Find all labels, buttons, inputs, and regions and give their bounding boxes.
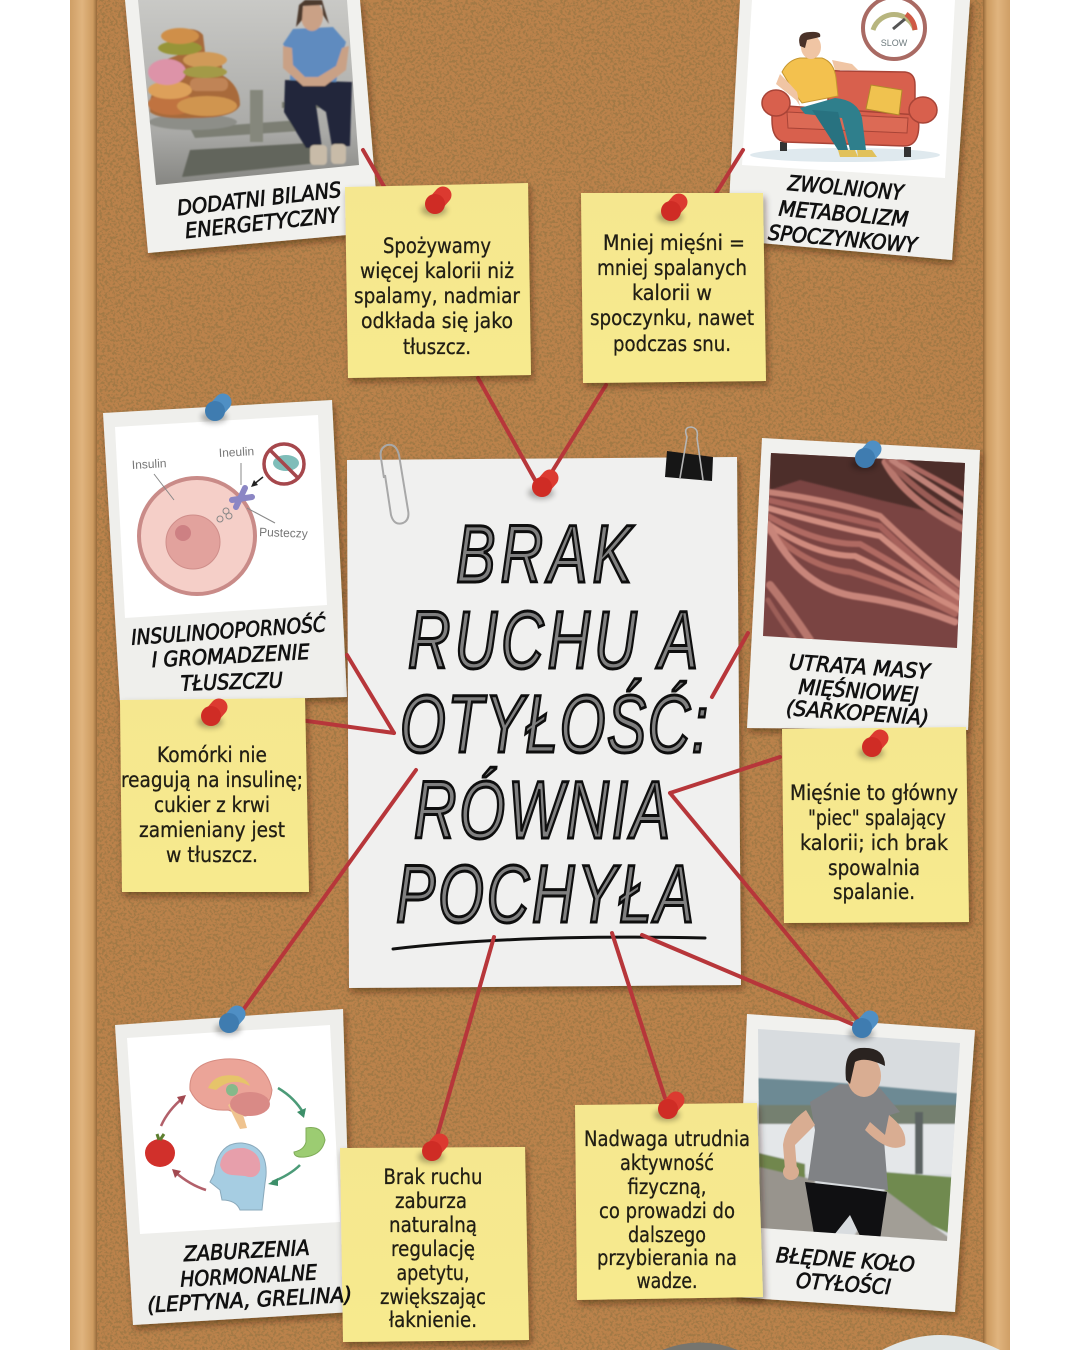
note text: kalorii w (632, 281, 712, 305)
caption: ZWOLNIONY (786, 171, 906, 205)
note text: Brak ruchu (384, 1165, 482, 1189)
note text (584, 1127, 750, 1293)
illustration: man on red sofa with slow gauge: SLOW (881, 38, 908, 48)
pin: red, note 6 (654, 1099, 680, 1121)
photo card: błędne koło otyłości (735, 1014, 975, 1312)
note text: Mięśnie to główny (790, 781, 958, 805)
note text: regulację (391, 1237, 475, 1261)
caption: ENERGETYCZNY (184, 203, 343, 243)
title: OTYŁOŚĆ: (400, 677, 708, 770)
caption: I GROMADZENIE (151, 640, 311, 672)
note text: kalorii; ich brak (800, 831, 949, 855)
title underline (393, 937, 705, 949)
bottom items peeking at the edge (662, 1335, 1000, 1350)
icon: paperclip (381, 445, 408, 524)
caption: TŁUSZCZU (180, 668, 283, 696)
title: RUCHU A (408, 595, 698, 686)
title: RÓWNIA (414, 765, 670, 856)
note text: tłuszcz. (403, 335, 471, 359)
caption (785, 650, 933, 730)
note text: spoczynku, nawet (590, 306, 754, 330)
note text: Komórki nie (157, 743, 267, 767)
illustration: cell and insulin receptor: Ineulin (218, 444, 254, 460)
note text: co prowadzi do (599, 1199, 735, 1223)
photo card: utrata masy mięśniowej (747, 438, 980, 730)
caption: INSULINOOPORNOŚĆ (130, 611, 327, 650)
pin: red, center paper (528, 477, 554, 499)
title: POCHYŁA (396, 849, 694, 940)
note text (790, 781, 958, 904)
caption: OTYŁOŚCI (795, 1268, 892, 1299)
note text: spowalnia (828, 856, 920, 880)
illustration: cell and insulin receptor (115, 415, 327, 618)
note text: zwiększając (380, 1285, 486, 1309)
center paper with title (347, 427, 741, 988)
pin: red, note 4 (858, 737, 884, 759)
illustration: brain, stomach, head and apple cycle (127, 1025, 340, 1234)
title (396, 509, 708, 940)
note text: fizyczną, (628, 1175, 706, 1199)
caption (767, 171, 920, 258)
icon: binder clip (665, 427, 713, 481)
sticky note: metabolizm (581, 193, 766, 383)
pin: red, note 5 (418, 1141, 444, 1163)
pin: blue, hormone photo (215, 1013, 241, 1035)
note text: naturalną (389, 1213, 477, 1237)
caption: zaburzenia hormonalne: HORMONALNE (180, 1260, 318, 1292)
sticky note: sarkopenia (782, 727, 969, 923)
note text (590, 231, 754, 356)
caption: METABOLIZM (778, 196, 909, 232)
sticky note: insulinooporność (120, 698, 309, 892)
sticky note: zaburzenia hormonalne (340, 1147, 529, 1342)
note text: spalamy, nadmiar (354, 284, 520, 308)
caption: zaburzenia hormonalne: (LEPTYNA, GRELINA) (147, 1283, 353, 1317)
photo: food versus woman on a scale (138, 0, 359, 185)
pin: red, note 3 (197, 706, 223, 728)
pin: blue, runner photo (848, 1018, 874, 1040)
illustration: cell and insulin receptor: Pusteczy (259, 525, 308, 541)
pin: blue, muscle photo (851, 448, 877, 470)
left wooden frame (70, 0, 97, 1350)
right wooden frame (983, 0, 1010, 1350)
photo card: zwolniony metabolizm spoczynkowy (727, 0, 970, 260)
caption: DODATNI BILANS (176, 178, 343, 220)
pin: blue, insulin photo (201, 401, 227, 423)
note text: reagują na insulinę; (121, 768, 303, 792)
note text: przybierania na (597, 1246, 737, 1270)
caption: MIĘŚNIOWEJ (798, 674, 919, 707)
caption (775, 1243, 916, 1299)
caption: BŁĘDNE KOŁO (775, 1243, 916, 1277)
photo: running woman (750, 1025, 965, 1245)
note text: spalanie. (833, 880, 915, 904)
note text: apetytu, (396, 1261, 470, 1285)
note text: cukier z krwi (154, 793, 270, 817)
illustration: man on red sofa with slow gauge (740, 0, 960, 180)
note text (121, 743, 303, 867)
note text: odkłada się jako (361, 309, 513, 333)
caption: zaburzenia hormonalne (147, 1236, 353, 1317)
photo card: insulinooporność (103, 400, 347, 703)
caption: UTRATA MASY (788, 650, 933, 684)
note text: mniej spalanych (597, 256, 747, 280)
note text (380, 1165, 486, 1332)
note text: Mniej mięśni = (603, 231, 745, 255)
photo: muscle fibres (760, 450, 970, 650)
photo card: dodatni bilans energetyczny (125, 0, 380, 253)
caption: zaburzenia hormonalne: ZABURZENIA (182, 1236, 310, 1266)
note text: podczas snu. (613, 332, 731, 356)
note text: wadze. (636, 1269, 698, 1293)
pin: red, note 1 (421, 194, 447, 216)
caption (176, 178, 343, 243)
note text: zamieniany jest (139, 818, 285, 842)
note text (354, 234, 520, 359)
note text: "piec" spalający (808, 806, 946, 830)
note text: Nadwaga utrudnia (584, 1127, 750, 1151)
note text: łaknienie. (389, 1308, 477, 1332)
sticky note: błędne koło (575, 1103, 763, 1300)
note text: w tłuszcz. (166, 843, 258, 867)
note text: Spożywamy (383, 234, 491, 258)
note text: aktywność (620, 1151, 714, 1175)
pin: red, note 2 (657, 201, 683, 223)
illustration: cell and insulin receptor: Insulin (131, 456, 167, 472)
note text: więcej kalorii niż (360, 259, 514, 283)
caption: (SARKOPENIA) (785, 696, 930, 730)
note text: zaburza (395, 1189, 467, 1213)
note text: dalszego (628, 1223, 706, 1247)
caption (130, 611, 327, 696)
caption: SPOCZYNKOWY (767, 221, 920, 258)
red strings connecting items (243, 150, 858, 1140)
title: BRAK (456, 509, 635, 600)
photo card: zaburzenia hormonalne (115, 1009, 352, 1325)
sticky note: dodatni bilans (345, 183, 531, 378)
